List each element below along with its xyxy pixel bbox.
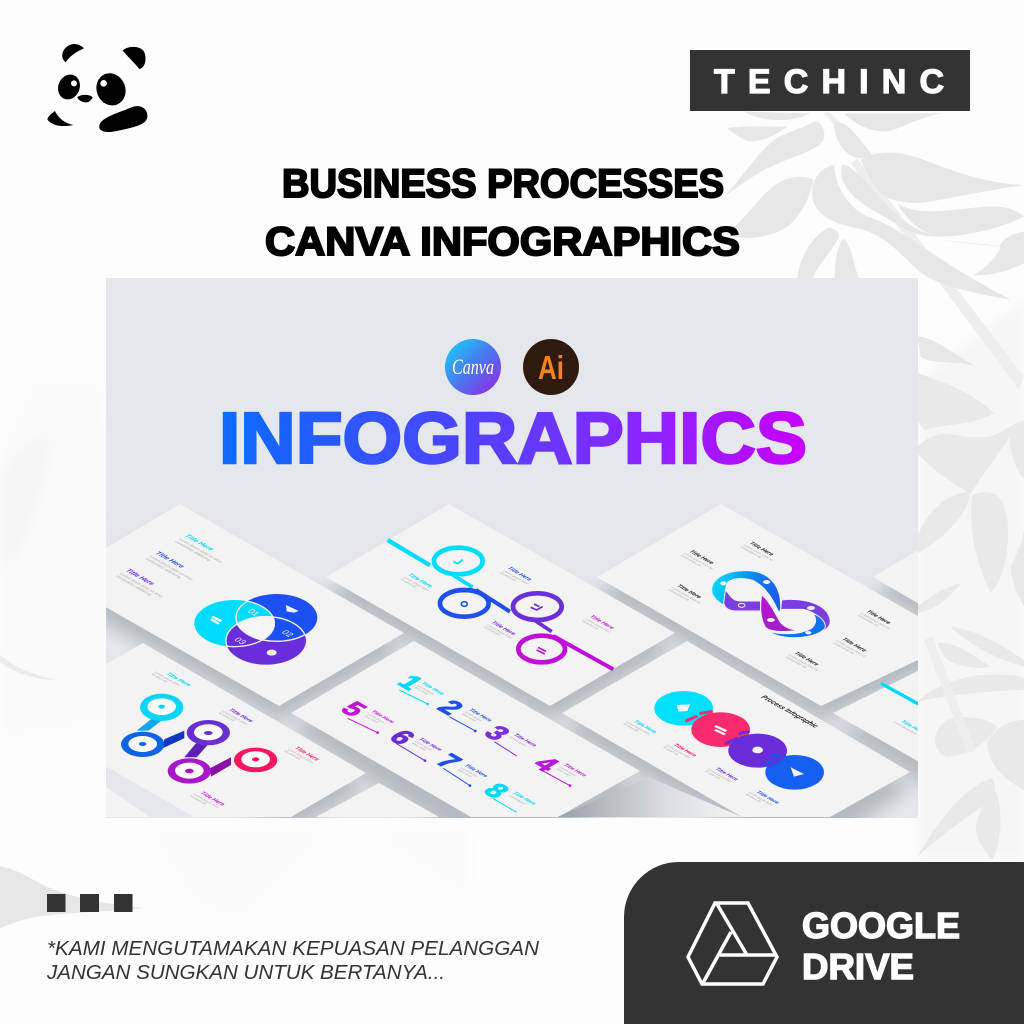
venn labels: Title Here <box>153 551 186 569</box>
venn labels: Title Here <box>124 568 156 587</box>
background mountain wash <box>0 300 1024 920</box>
infinity labels: Lorem ipsum dolor sit <box>742 544 774 562</box>
process labels: Lorem ipsum dolor <box>707 768 734 783</box>
title: CANVA INFOGRAPHICS <box>265 220 740 264</box>
process labels: Title Here <box>713 767 739 782</box>
cut-off slide at right: Title Here <box>899 720 925 735</box>
line infographic rings continued <box>513 593 613 669</box>
numbered step 4 and labels: Title Here <box>562 763 588 778</box>
infinity labels: consectetur elit <box>784 656 808 669</box>
numbered steps: 1 2 3 5 6 7 8: 8 <box>477 779 517 802</box>
icon: Illustrator logo <box>523 339 579 395</box>
process labels: Title Here <box>672 743 698 758</box>
main heading: INFOGRAPHICS: INFOGRAPHICS <box>219 399 807 479</box>
label: google drive: GOOGLE <box>802 905 960 946</box>
label: google drive: DRIVE <box>802 946 914 987</box>
note text: JANGAN SUNGKAN UNTUK BERTANYA... <box>46 962 445 984</box>
numbered steps: 1 2 3 5 6 7 8: 2 <box>431 696 471 719</box>
note text: *KAMI MENGUTAMAKAN KEPUASAN PELANGGAN <box>47 938 540 960</box>
cut-off slide at right: Lorem ipsum dolor <box>892 721 919 736</box>
venn labels: Lorem ipsum dolor sit amet <box>178 537 225 564</box>
infinity labels: Lorem ipsum dolor sit <box>835 640 867 658</box>
process labels: sit amet elit <box>704 770 721 780</box>
line infographic labels: Title Here <box>406 573 433 589</box>
venn labels: consectetur adipiscing <box>174 540 212 562</box>
numbered step 4 and labels: dolor amet <box>555 768 572 777</box>
loop infographic labels: sit amet elit <box>217 712 236 722</box>
line infographic labels: sit amet elit <box>399 578 418 588</box>
infinity infographic <box>712 571 830 638</box>
cut-off slide at right <box>880 682 918 735</box>
infinity labels: Title Here <box>792 651 820 667</box>
line infographic labels: sit amet elit <box>499 571 517 582</box>
numbered step 4 and labels <box>508 733 588 808</box>
infinity labels: Title Here <box>864 610 892 625</box>
infinity labels: Lorem ipsum dolor sit <box>787 654 819 672</box>
loop infographic labels: Title Here <box>227 708 254 724</box>
title <box>265 162 740 264</box>
numbered steps: 1 2 3 5 6 7 8: Title Here <box>419 681 445 696</box>
loop infographic labels: Lorem ipsum dolor <box>221 710 249 726</box>
background leaf bottom left <box>0 866 145 928</box>
infinity labels: Lorem ipsum dolor sit <box>683 552 714 570</box>
loop infographic labels: sit amet elit <box>189 795 207 805</box>
venn labels: consectetur adipiscing <box>115 574 153 596</box>
venn labels <box>116 534 222 598</box>
infinity labels: Title Here <box>687 550 715 565</box>
line infographic labels: sit amet elit <box>483 626 501 636</box>
venn labels: consectetur adipiscing <box>144 557 183 579</box>
panel: preview image <box>106 278 918 818</box>
brand badge: TECHINC <box>690 50 970 111</box>
loop infographic labels: Lorem ipsum dolor <box>153 671 182 687</box>
icon: Canva logo: Canva <box>452 354 494 379</box>
numbered steps: 1 2 3 5 6 7 8: Title Here <box>369 710 395 725</box>
numbered steps: 1 2 3 5 6 7 8: Lorem ipsum <box>464 711 483 722</box>
process labels <box>622 718 780 809</box>
loop infographic labels: Title Here <box>198 791 226 807</box>
slide shadows <box>106 581 918 818</box>
infinity labels: Title Here <box>840 637 867 653</box>
numbered steps: 1 2 3 5 6 7 8: 3 <box>477 721 517 744</box>
loop infographic labels: Lorem ipsum dolor <box>192 793 221 809</box>
infographic group: right column <box>508 541 925 809</box>
venn labels: Title Here <box>183 533 215 552</box>
icon: google drive <box>688 903 777 984</box>
loop infographic labels: Title Here <box>164 672 192 688</box>
loop infographic labels: sit amet elit <box>150 673 169 683</box>
numbered steps: 1 2 3 5 6 7 8: Title Here <box>417 737 443 752</box>
decorative squares <box>47 894 132 912</box>
numbered step 4 and labels: Lorem ipsum <box>558 766 578 777</box>
numbered step 4 and labels: Title Here <box>512 733 538 748</box>
process labels: Lorem ipsum dolor <box>625 721 652 736</box>
numbered steps: 1 2 3 5 6 7 8: Lorem ipsum <box>416 684 436 695</box>
background leaves top right <box>724 112 1024 390</box>
loop infographic <box>121 694 277 784</box>
numbered steps: 1 2 3 5 6 7 8: Lorem ipsum <box>414 740 433 751</box>
numbered steps: 1 2 3 5 6 7 8: dolor amet <box>411 742 427 751</box>
line infographic labels: Title Here <box>489 621 517 636</box>
numbered steps: 1 2 3 5 6 7 8: Lorem ipsum <box>459 767 479 778</box>
infinity labels: Lorem ipsum dolor sit <box>859 612 891 630</box>
note text <box>46 938 540 984</box>
numbered steps: 1 2 3 5 6 7 8 <box>334 671 517 812</box>
numbered steps: 1 2 3 5 6 7 8: 6 <box>382 726 422 749</box>
background leaves right <box>917 380 1024 860</box>
loop infographic labels <box>150 668 320 811</box>
line infographic labels continued: sit amet elit <box>581 620 599 630</box>
numbered step 4 and labels: Lorem ipsum <box>508 736 528 747</box>
line infographic labels: Lorem ipsum dolor <box>486 624 514 640</box>
process labels: Lorem ipsum dolor <box>665 744 692 759</box>
brand badge: TECHINC: TECHINC <box>714 63 944 101</box>
process labels: sit amet elit <box>662 746 679 756</box>
venn diagram <box>194 594 317 665</box>
process labels: Title Here <box>632 720 658 735</box>
line infographic labels: Title Here <box>505 566 533 582</box>
venn labels: Lorem ipsum dolor sit amet <box>119 572 166 599</box>
title: BUSINESS PROCESSES <box>282 162 724 206</box>
infinity labels: Title Here <box>675 584 702 600</box>
infinity labels: consectetur elit <box>739 546 763 559</box>
numbered step 4 and labels: 4 <box>527 752 567 776</box>
numbered step 4 and labels: Title Here <box>511 791 537 806</box>
line infographic labels continued: Title Here <box>588 615 615 630</box>
line infographic labels <box>399 566 536 642</box>
venn diagram: 01 <box>245 608 262 617</box>
numbered step 4 and labels: Lorem ipsum <box>508 794 527 805</box>
numbered steps: 1 2 3 5 6 7 8: dolor amet <box>413 686 430 695</box>
infinity labels: consectetur elit <box>667 588 690 601</box>
process labels: Lorem ipsum dolor <box>748 791 775 807</box>
numbered steps: 1 2 3 5 6 7 8: 5 <box>334 697 374 720</box>
infinity labels: consectetur elit <box>679 554 703 567</box>
venn diagram: 03 <box>232 636 249 646</box>
numbered steps: 1 2 3 5 6 7 8: dolor amet <box>461 713 477 722</box>
line infographic labels continued: Lorem ipsum dolor <box>584 618 613 634</box>
process labels: Title Here <box>754 790 780 805</box>
icon: Canva logo <box>445 339 501 395</box>
numbered steps: 1 2 3 5 6 7 8: dolor amet <box>363 714 380 724</box>
line infographic rings <box>388 540 510 617</box>
numbered steps: 1 2 3 5 6 7 8: 1 <box>391 671 431 694</box>
background arc left <box>0 655 56 680</box>
venn diagram: 02 <box>279 629 296 638</box>
process labels: sit amet elit <box>745 793 762 803</box>
panel: google drive <box>624 862 1024 1024</box>
line infographic labels: Lorem ipsum dolor <box>402 576 431 592</box>
numbered steps: 1 2 3 5 6 7 8: dolor amet <box>456 768 473 778</box>
shadow wedge <box>558 777 742 817</box>
infinity labels: consectetur elit <box>832 642 855 655</box>
loop infographic labels: sit amet elit <box>283 750 302 760</box>
venn labels: Lorem ipsum dolor sit amet <box>148 555 195 581</box>
infinity labels: Title Here <box>747 541 775 557</box>
logo: panda <box>47 44 147 132</box>
infinity labels: Lorem ipsum dolor sit <box>670 586 702 604</box>
numbered steps: 1 2 3 5 6 7 8: Title Here <box>463 764 489 779</box>
loop infographic labels: Lorem ipsum dolor <box>287 748 315 764</box>
infinity labels <box>667 541 896 673</box>
infinity labels: consectetur elit <box>856 614 880 627</box>
slide sheets <box>60 504 960 817</box>
numbered steps: 1 2 3 5 6 7 8: 7 <box>429 750 469 773</box>
label: google drive <box>802 905 960 987</box>
process circles infographic <box>654 691 824 790</box>
icon: Illustrator logo: Ai <box>538 349 564 386</box>
infographic group: left column <box>115 533 536 812</box>
numbered steps: 1 2 3 5 6 7 8: Title Here <box>467 708 493 723</box>
loop infographic labels: Title Here <box>293 746 320 762</box>
numbered steps: 1 2 3 5 6 7 8: Lorem ipsum <box>366 713 386 724</box>
line infographic labels: Lorem ipsum dolor <box>502 569 530 586</box>
process heading: Process Infographic <box>759 695 820 729</box>
process labels: sit amet elit <box>622 722 639 732</box>
